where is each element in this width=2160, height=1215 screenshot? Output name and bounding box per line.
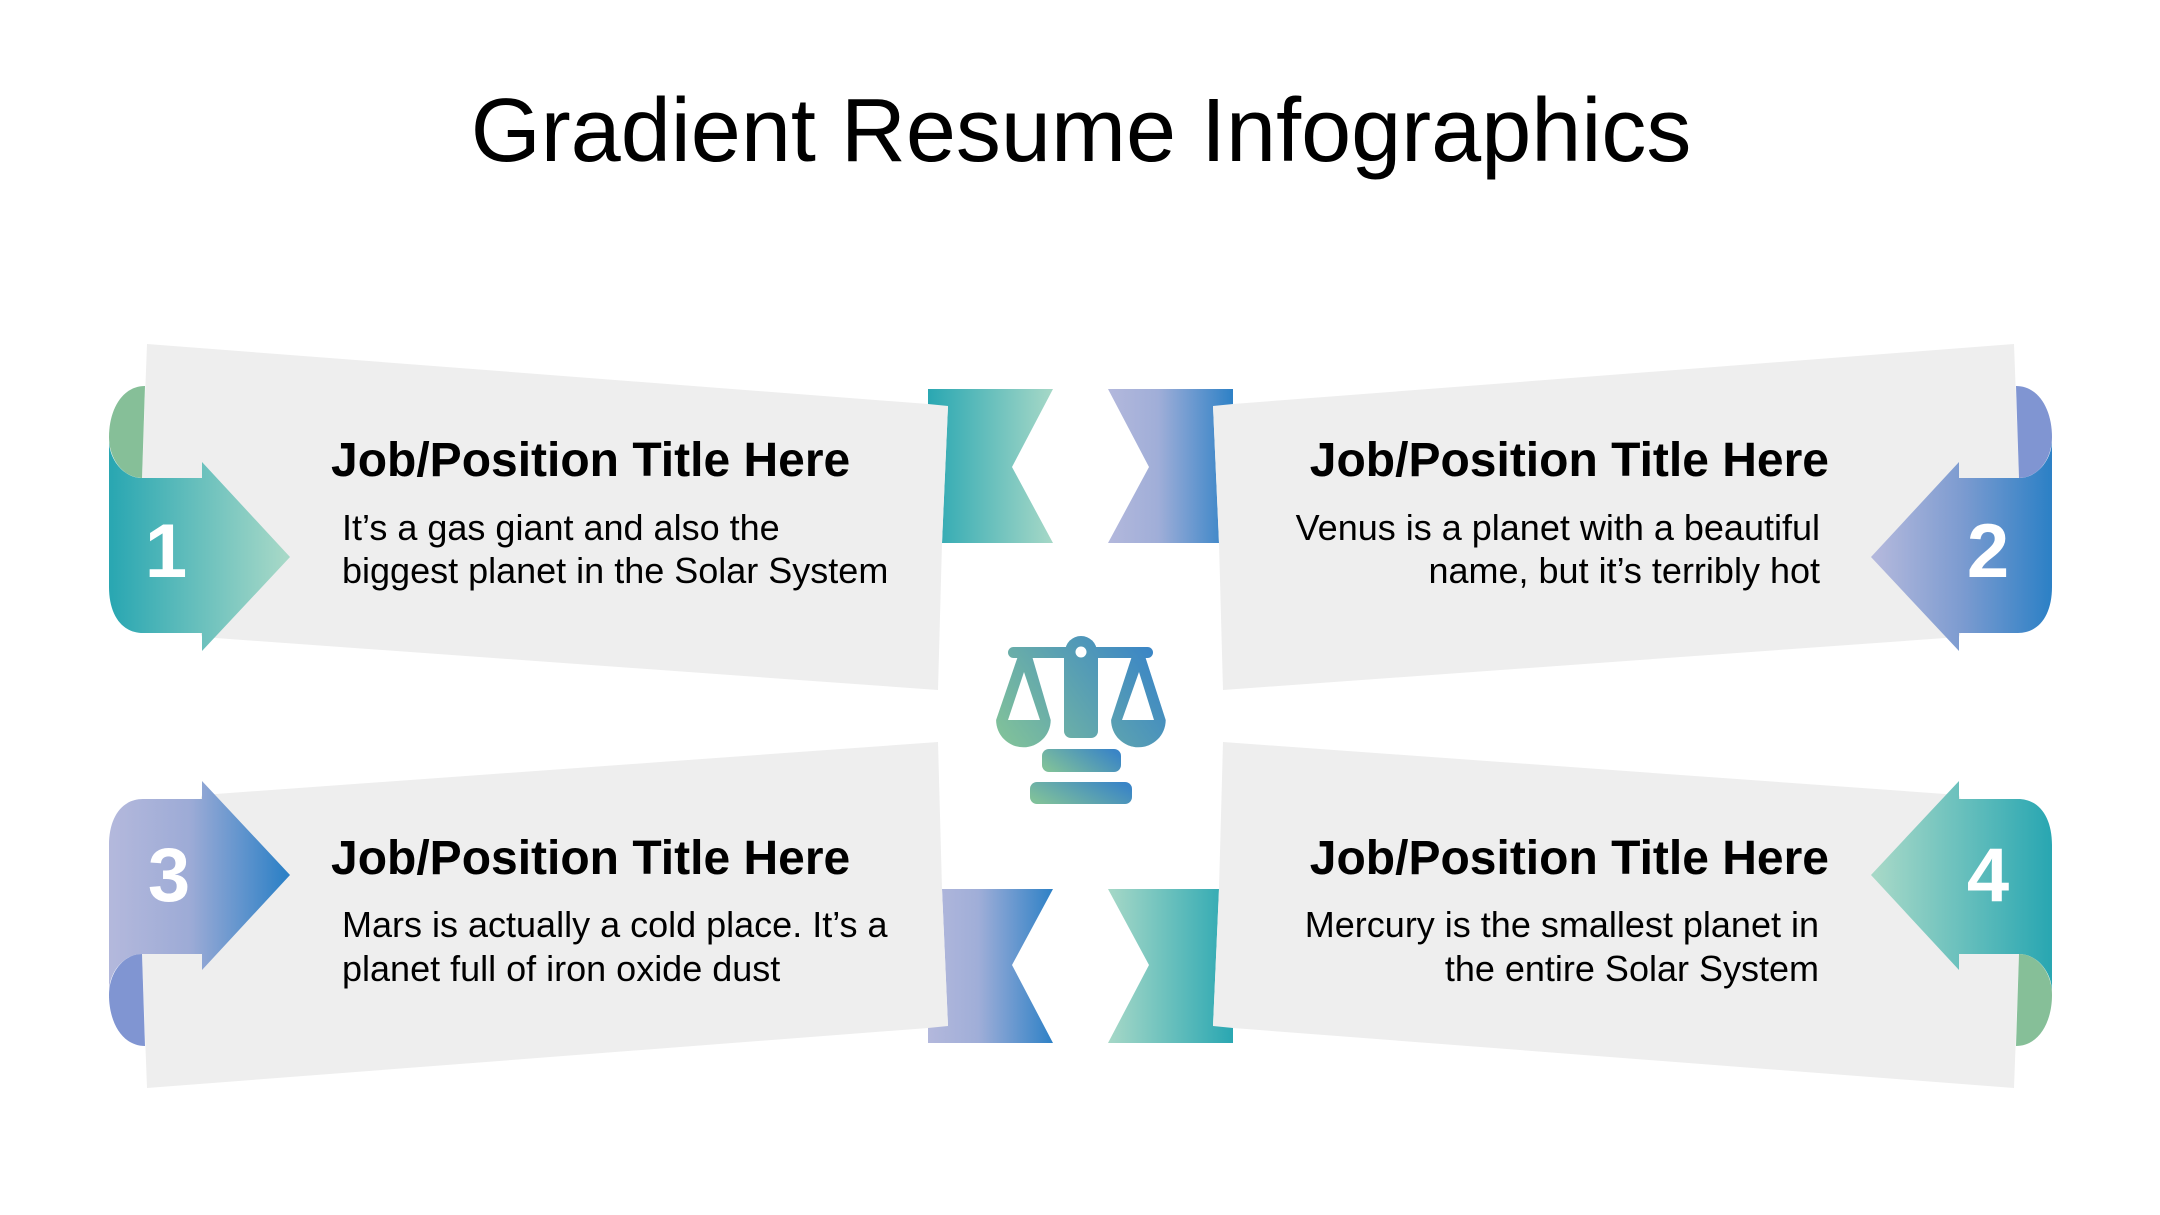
arrow 1 bbox=[109, 440, 290, 651]
heading 1: Job/Position Title Here bbox=[331, 434, 850, 487]
arrow 4 bbox=[1871, 781, 2052, 992]
text block 4: Mercury is the smallest planet in bbox=[1305, 904, 1819, 945]
heading 4: Job/Position Title Here bbox=[1310, 832, 1829, 885]
ribbon 2 bbox=[1108, 389, 1233, 543]
scale openings bbox=[1008, 646, 1154, 720]
card 3 bbox=[142, 742, 948, 1088]
number 2: 2 bbox=[1967, 509, 2009, 594]
panel: item 4 bbox=[1108, 742, 2052, 1088]
heading 3: Job/Position Title Here bbox=[331, 832, 850, 885]
panel: item 2 bbox=[1108, 344, 2052, 690]
text block 2: name, but it’s terribly hot bbox=[1428, 550, 1820, 591]
panel: item 3 bbox=[109, 742, 1053, 1088]
panel: item 1 bbox=[109, 344, 1053, 690]
card 4 bbox=[1213, 742, 2019, 1088]
text block 2: Venus is a planet with a beautiful bbox=[1296, 507, 1820, 548]
ribbon 1 bbox=[928, 389, 1053, 543]
base bar lower bbox=[1030, 782, 1132, 804]
arrow 2 bbox=[1871, 440, 2052, 651]
title: Gradient Resume Infographics bbox=[471, 81, 1691, 181]
text block 4: the entire Solar System bbox=[1445, 948, 1819, 989]
card 2 bbox=[1213, 344, 2019, 690]
curl 3 bbox=[109, 954, 145, 1046]
text block 3: planet full of iron oxide dust bbox=[342, 948, 780, 989]
card 1 bbox=[142, 344, 948, 690]
ribbon 3 bbox=[928, 889, 1053, 1043]
text block 3: Mars is actually a cold place. It’s a bbox=[342, 904, 889, 945]
heading 2: Job/Position Title Here bbox=[1310, 434, 1829, 487]
curl 4 bbox=[2016, 954, 2052, 1046]
number 3: 3 bbox=[148, 833, 190, 918]
text block 1: biggest planet in the Solar System bbox=[342, 550, 888, 591]
icon: balance scale bbox=[996, 636, 1166, 804]
number 1: 1 bbox=[145, 509, 187, 594]
number 4: 4 bbox=[1967, 833, 2009, 918]
ribbon 4 bbox=[1108, 889, 1233, 1043]
base bar upper bbox=[1042, 749, 1121, 772]
scale beam, post and pans bbox=[996, 636, 1166, 747]
curl 2 bbox=[2016, 386, 2052, 478]
arrow 3 bbox=[109, 781, 290, 992]
curl 1 bbox=[109, 386, 145, 478]
text block 1: It’s a gas giant and also the bbox=[342, 507, 780, 548]
